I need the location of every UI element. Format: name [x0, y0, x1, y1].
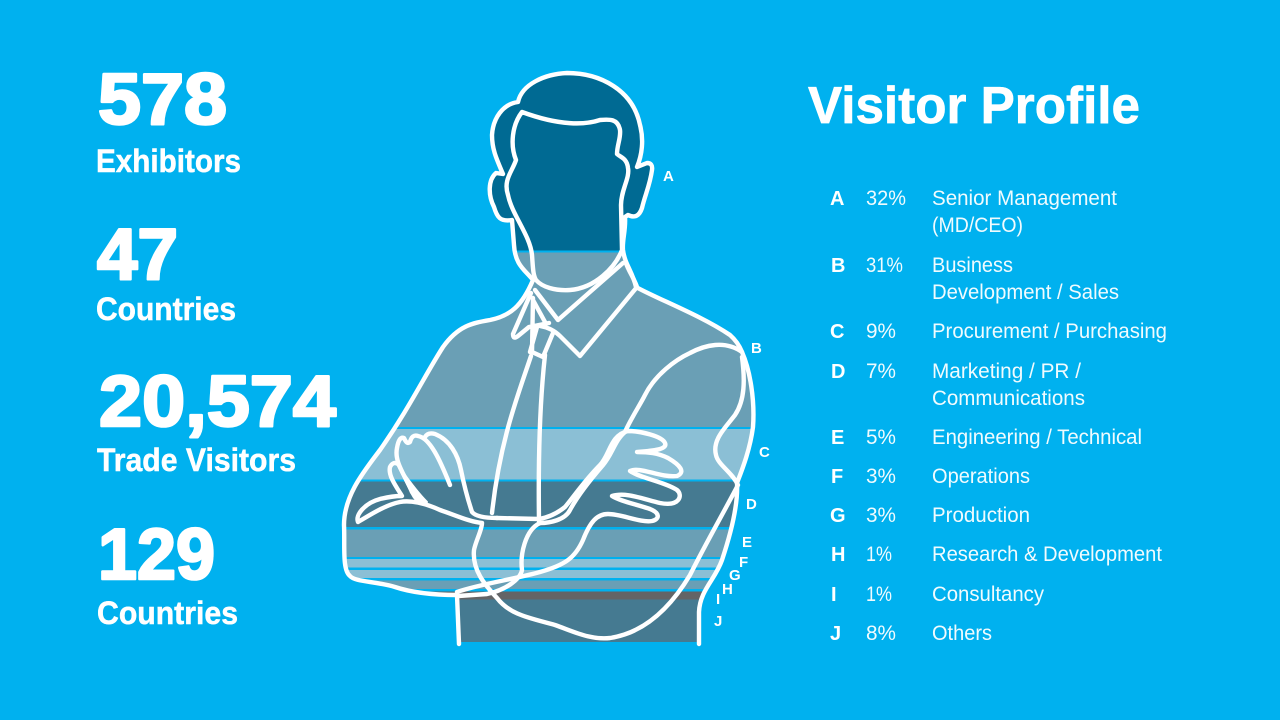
outline: crossed arm and left sleeve: [357, 357, 744, 638]
row B: 31%: [866, 254, 903, 277]
band letter labels: F: [739, 554, 748, 571]
outline: lower arm: [458, 523, 540, 596]
outline: upper arm: [540, 345, 742, 523]
row H: Research & Development: [932, 543, 1162, 566]
row I: 1%: [866, 583, 892, 606]
stat: 20,574 trade visitors: [97, 362, 336, 478]
row G: [830, 504, 1030, 527]
row G: Production: [932, 504, 1030, 527]
row J: [830, 622, 992, 645]
outline: face and hairline: [507, 112, 628, 290]
row I: I: [831, 584, 837, 606]
stat: 47 countries: 47: [97, 215, 178, 295]
band letter labels: [663, 168, 770, 630]
row D: 7%: [866, 360, 896, 383]
row J: 8%: [866, 622, 896, 645]
outline: shirt collar: [513, 263, 637, 357]
row J: J: [830, 623, 841, 645]
row G: G: [830, 505, 846, 527]
row C: [830, 320, 1167, 343]
row E: E: [831, 427, 844, 449]
row D: [831, 360, 1085, 410]
row E: Engineering / Technical: [932, 426, 1142, 449]
stat: 578 exhibitors: 578: [98, 60, 227, 140]
heading: visitor profile: Visitor Profile: [808, 77, 1140, 135]
row I: [831, 583, 1044, 606]
row F: [831, 465, 1030, 488]
row D: Communications: [932, 387, 1085, 410]
row H: 1%: [866, 543, 892, 566]
row F: F: [831, 466, 843, 488]
row I: Consultancy: [932, 583, 1044, 606]
row F: Operations: [932, 465, 1030, 488]
row E: [831, 426, 1142, 449]
row B: Development / Sales: [932, 281, 1119, 304]
row A: Senior Management: [932, 187, 1117, 210]
stacked bands A to J: [340, 60, 760, 642]
row A: 32%: [866, 187, 906, 210]
row D: Marketing / PR /: [932, 360, 1081, 383]
row B: [831, 254, 1119, 304]
band letter labels: C: [759, 444, 770, 461]
thick finger wedge: [397, 464, 427, 503]
row D: D: [831, 361, 845, 383]
row H: [831, 543, 1162, 566]
row B: Business: [932, 254, 1013, 277]
stat: 129 countries: 129: [98, 515, 215, 595]
stat: 578 exhibitors: Exhibitors: [96, 143, 241, 179]
row C: Procurement / Purchasing: [932, 320, 1167, 343]
band letter labels: E: [742, 534, 752, 551]
row A: [830, 187, 1117, 237]
row H: H: [831, 544, 845, 566]
row F: 3%: [866, 465, 896, 488]
band letter labels: H: [722, 581, 733, 598]
row A: A: [830, 188, 844, 210]
stat: 20,574 trade visitors: Trade Visitors: [97, 442, 296, 478]
outline: tie: [492, 355, 545, 521]
outline: fingers of left hand: [396, 433, 497, 518]
outline: body silhouette: [344, 73, 753, 644]
row G: 3%: [866, 504, 896, 527]
band letter labels: J: [714, 613, 722, 630]
row C: 9%: [866, 320, 896, 343]
band letter labels: I: [716, 591, 720, 608]
band letter labels: G: [729, 567, 741, 584]
legend table: [830, 187, 1167, 645]
row B: B: [831, 255, 845, 277]
stat: 129 countries: [97, 515, 238, 631]
band letter labels: D: [746, 496, 757, 513]
band letter labels: A: [663, 168, 674, 185]
row E: 5%: [866, 426, 896, 449]
band letter labels: B: [751, 340, 762, 357]
row C: C: [830, 321, 844, 343]
figure: businessman with banded percentage fill: [340, 60, 770, 644]
row J: Others: [932, 622, 992, 645]
stat: 20,574 trade visitors: 20,574: [99, 362, 336, 442]
stat: 47 countries: [96, 215, 236, 327]
outline: right hand and forearm: [457, 431, 681, 592]
row A: (MD/CEO): [932, 214, 1023, 237]
stat: 129 countries: Countries: [97, 595, 238, 631]
stat: 578 exhibitors: [96, 60, 241, 179]
stat: 47 countries: Countries: [96, 291, 236, 327]
